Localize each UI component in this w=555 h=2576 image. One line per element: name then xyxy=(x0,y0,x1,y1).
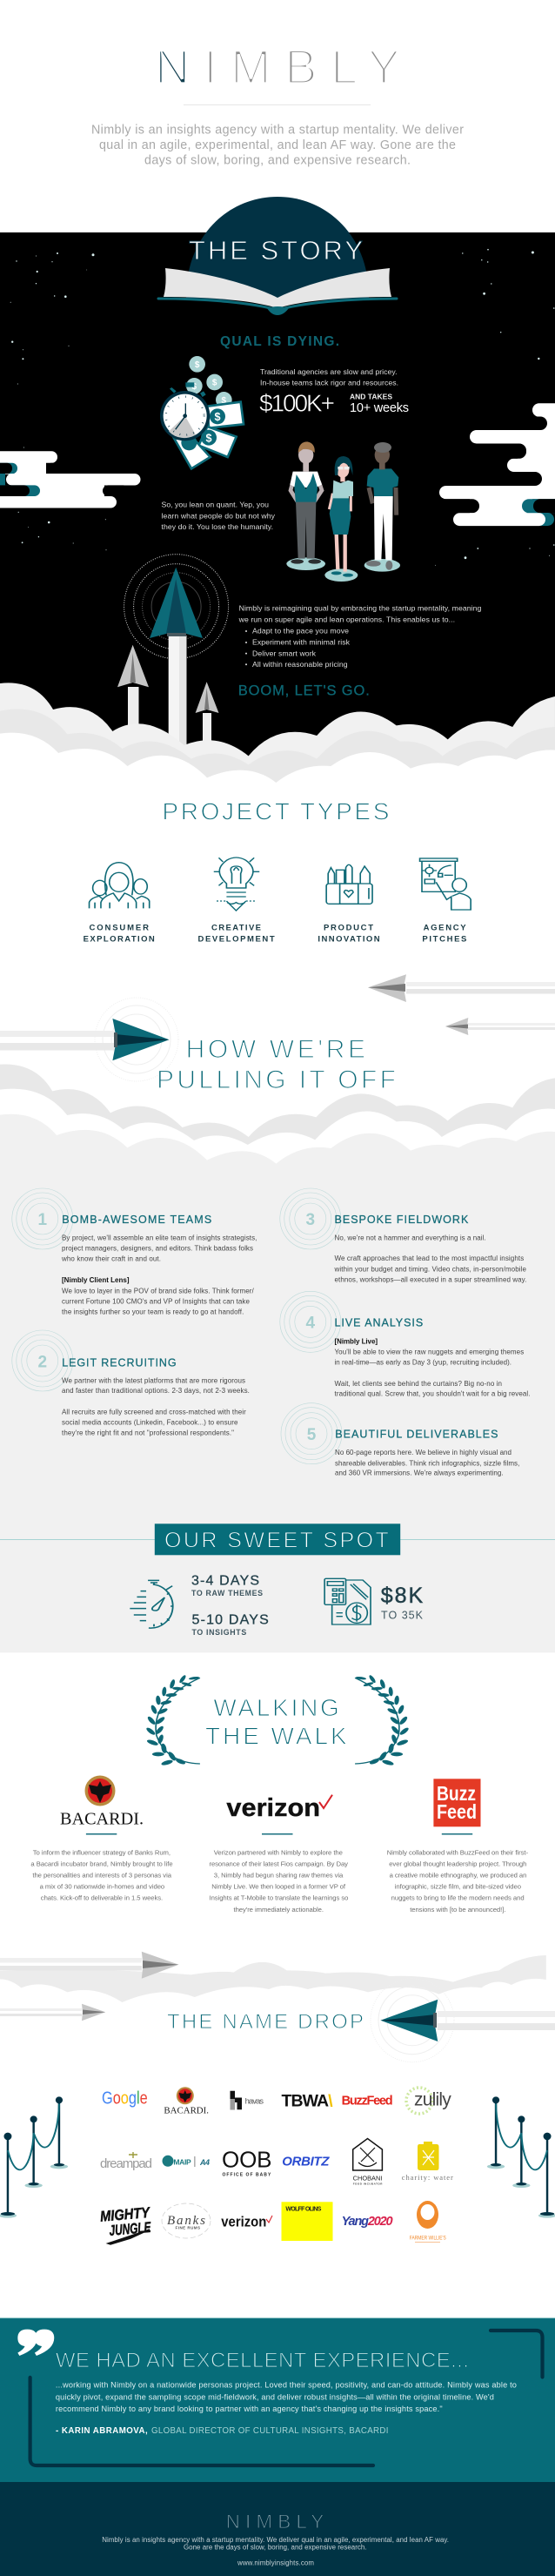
heading: HOW WE'RE xyxy=(186,1035,365,1064)
panel: how it works steps xyxy=(0,1184,555,1652)
illustration: three people xyxy=(286,441,400,582)
right space cloud xyxy=(435,403,555,526)
logo: google: Google xyxy=(102,2089,148,2109)
logo: wolff olins: WOLFF OLINS xyxy=(285,2206,322,2212)
arrow: teal xyxy=(380,2000,555,2041)
case text: they're immediately actionable. xyxy=(233,1906,324,1914)
panel: how we're pulling it off xyxy=(0,974,555,1094)
step 1: By project, we'll assemble an elite team of insights strategists, xyxy=(62,1234,257,1241)
step 1: current Fortune 100 CMO's and VP of Insights that can take xyxy=(62,1297,250,1305)
intro text: Nimbly is an insights agency with a startup mentality. We deliver xyxy=(91,124,464,138)
left stanchions xyxy=(0,2096,68,2218)
step 2 xyxy=(38,1354,250,1437)
text: reimagining qual xyxy=(238,604,482,669)
step 3 xyxy=(306,1211,527,1283)
step 2: they're the right fit and not "professional respondents." xyxy=(62,1429,234,1437)
labels: EXPLORATION xyxy=(84,935,155,945)
icon: lightbulb pencil xyxy=(214,858,259,911)
logo: charity water: charity: water xyxy=(402,2173,453,2182)
stat: timing: 3-4 DAYS xyxy=(191,1574,259,1589)
icon: stopwatch, coins and bills: $ xyxy=(222,396,227,406)
icon: stopwatch, coins and bills xyxy=(160,356,244,468)
rings behind teal arrow xyxy=(95,998,178,1081)
heading: PULLING IT OFF xyxy=(157,1066,396,1094)
icon: calculator and invoice xyxy=(324,1578,371,1624)
text: traditional agencies xyxy=(260,367,398,387)
right stanchions xyxy=(487,2096,555,2218)
heading: boom lets go: BOOM, LET'S GO. xyxy=(238,683,370,699)
step 4: LIVE ANALYSIS xyxy=(334,1316,423,1328)
case: buzzfeed xyxy=(387,1779,528,1914)
logo: mighty jungle: MIGHTY xyxy=(99,2204,151,2225)
logo: banks rums: FINE RUMS xyxy=(176,2226,200,2230)
stat: cost: TO 35K xyxy=(381,1610,424,1622)
quote text: recommend Nimbly to any brand looking to partner with an agency that's changing up the insights space." xyxy=(56,2404,443,2413)
icon: laurel wreath xyxy=(145,1674,410,1766)
logo: chobani: CHOBANI xyxy=(353,2176,382,2183)
case text: resonance of their latest Fios campaign. By Day xyxy=(209,1860,348,1868)
logo: havas xyxy=(230,2091,264,2109)
left space cloud xyxy=(0,451,141,508)
logo: buzzfeed: Buzz xyxy=(437,1782,476,1805)
step 2: We partner with the latest platforms that are more rigorous xyxy=(62,1376,245,1384)
logo: maip: MAIP xyxy=(173,2158,191,2167)
logo: bacardi: BACARDI. xyxy=(164,2105,209,2115)
bracket: bottom left xyxy=(30,2378,373,2465)
logo: verizon: verizon xyxy=(221,2215,266,2230)
logo: verizon: verizon xyxy=(226,1794,320,1822)
rings xyxy=(371,1979,454,2062)
rocket rings xyxy=(124,555,229,659)
text: reimagining qual: Deliver smart work xyxy=(252,649,317,657)
step 3: No, we're not a hammer and everything is a nail. xyxy=(334,1234,486,1241)
step 4: You'll be able to view the raw nuggets and emerging themes xyxy=(334,1349,524,1356)
case: verizon xyxy=(209,1794,348,1914)
step 1: [Nimbly Client Lens] xyxy=(62,1276,130,1284)
step 1: BOMB-AWESOME TEAMS xyxy=(62,1214,211,1226)
logo: banks rums xyxy=(162,2203,211,2238)
case text: Nimbly Live. We then looped in a former VP of xyxy=(211,1883,346,1891)
man with vest xyxy=(286,441,325,570)
arrow: gray large xyxy=(0,1952,179,1979)
footer text xyxy=(102,2536,449,2566)
logo: yang 2020: Yang2020 xyxy=(342,2215,393,2229)
text: lean on quant: learn what people do but not why xyxy=(162,512,276,521)
clouds: top of gray panel xyxy=(0,1064,555,1190)
icon: stopwatch, coins and bills: $ xyxy=(195,360,200,370)
arrow: gray large xyxy=(368,974,555,1002)
step 4: in real-time—as early as Day 3 (yup, recruiting included). xyxy=(334,1359,512,1367)
logo: mighty jungle: JUNGLE xyxy=(109,2219,152,2239)
logo: farmer willies xyxy=(410,2201,446,2243)
step 3: 3 xyxy=(306,1211,315,1229)
heading: WALKING xyxy=(213,1694,339,1721)
footer text: Gone are the days of slow, boring, and expensive research. xyxy=(184,2544,367,2552)
attribution: GLOBAL DIRECTOR OF CULTURAL INSIGHTS, BACARDI xyxy=(151,2426,388,2436)
logo: maip: A4 xyxy=(199,2158,210,2167)
text: reimagining qual: Nimbly is reimagining qual by embracing the startup mentality, meaning xyxy=(239,604,482,613)
labels: DEVELOPMENT xyxy=(198,935,275,945)
logo: banks rums: Banks xyxy=(167,2214,205,2228)
heading: qual is dying: QUAL IS DYING. xyxy=(220,334,339,349)
logo: buzzfeed: BuzzFeed xyxy=(342,2095,393,2109)
text: traditional agencies: Traditional agencies are slow and pricey. xyxy=(260,367,397,376)
logo: chobani: FOOD INCUBATOR xyxy=(353,2182,383,2185)
icon: stopwatch xyxy=(130,1580,173,1628)
quote text xyxy=(56,2381,517,2413)
logo wordmark: N IMBLY xyxy=(155,39,400,94)
footer text: www.nimblyinsights.com xyxy=(237,2559,314,2566)
logo: charity water xyxy=(402,2142,453,2182)
stat: timing: 5-10 DAYS xyxy=(191,1612,269,1627)
stat: cost: $100K+ xyxy=(259,390,335,417)
text: lean on quant xyxy=(162,501,276,531)
heading: PROJECT TYPES xyxy=(162,798,389,825)
stat: timing: TO RAW THEMES xyxy=(191,1589,263,1597)
logo: buzzfeed: Feed xyxy=(437,1800,477,1823)
case: bacardi xyxy=(30,1776,173,1902)
heading: THE NAME DROP xyxy=(167,2010,364,2034)
logo: zulily xyxy=(406,2088,451,2114)
clouds band xyxy=(0,1955,546,2002)
step 2: 2 xyxy=(38,1354,47,1372)
labels: PRODUCT xyxy=(324,924,373,933)
heading: the story: THE STORY xyxy=(189,235,363,266)
step 5: BEAUTIFUL DELIVERABLES xyxy=(335,1429,498,1441)
panel: our sweet spot xyxy=(0,1523,555,1637)
banner: OUR SWEET SPOT xyxy=(164,1528,389,1552)
arrow: gray small xyxy=(445,1018,555,1035)
step 4: [Nimbly Live] xyxy=(334,1337,378,1345)
step 2: social media accounts (Linkedin, Facebook...) to ensure xyxy=(62,1418,238,1426)
stat: cost: $8K xyxy=(381,1584,424,1608)
logo: wolff olins xyxy=(282,2202,332,2241)
logo wall xyxy=(99,2087,453,2244)
step 3: BESPOKE FIELDWORK xyxy=(334,1214,469,1226)
logo: office of baby: OFFICE OF BABY xyxy=(223,2172,271,2177)
case text: a mix of 30 nationwide in-homes and video xyxy=(40,1883,164,1891)
text: lean on quant: So, you lean on quant. Yep, you xyxy=(162,501,269,509)
logo: mighty jungle xyxy=(99,2204,153,2244)
woman with glasses xyxy=(324,456,358,582)
step 3: within your budget and timing. Video chats, in-person/mobile xyxy=(334,1265,527,1273)
step 5: No 60-page reports here. We believe in highly visual and xyxy=(335,1449,512,1456)
number rings xyxy=(12,1188,342,1464)
logo: havas: havas xyxy=(245,2097,264,2107)
panel: the name drop xyxy=(0,1952,555,2244)
step 5: 5 xyxy=(307,1426,317,1444)
logo: orbitz: ORBITZ xyxy=(282,2155,330,2169)
panel: walking the walk xyxy=(30,1674,528,1914)
labels: AGENCY xyxy=(424,924,466,933)
icon: product bag xyxy=(326,864,372,904)
attribution: - KARIN ABRAMOVA, xyxy=(56,2426,148,2436)
logo: zulily: zulily xyxy=(414,2089,451,2109)
step 4: traditional qual. Screw that, you shouldn't wait for a big reveal. xyxy=(334,1390,531,1398)
case text: the personalities and interests of 3 personas via xyxy=(32,1872,172,1880)
logo: bacardi: BACARDI. xyxy=(60,1810,144,1829)
heading: WE HAD AN EXCELLENT EXPERIENCE... xyxy=(56,2349,469,2372)
footer text: Nimbly is an insights agency with a startup mentality. We deliver qual in an agile, experimental, and lean AF way. xyxy=(102,2536,449,2544)
stat: time xyxy=(350,393,409,415)
step 1 xyxy=(38,1211,257,1316)
logo: bacardi xyxy=(60,1776,144,1829)
heading xyxy=(205,1694,347,1749)
case text: To inform the influencer strategy of Banks Rum, xyxy=(33,1849,171,1857)
panel: project types xyxy=(84,798,471,945)
bracket: top right xyxy=(491,2331,543,2377)
step 3: ethnos, workshops—all executed in a super streamlined way. xyxy=(334,1275,526,1283)
stat: time: 10+ weeks xyxy=(350,401,409,415)
case text xyxy=(387,1849,528,1914)
step 4 xyxy=(306,1315,531,1398)
intro text: qual in an agile, experimental, and lean AF way. Gone are the xyxy=(99,138,456,152)
step 1: 1 xyxy=(38,1211,48,1229)
icon: paper arrows flying up xyxy=(117,568,219,749)
icon: open book with dome xyxy=(158,197,397,315)
panel: testimonial xyxy=(0,2317,555,2482)
quote text: ...working with Nimbly on a nationwide personas project. Loved their speed, positivity, and can-do attitude. Nimbly was able to xyxy=(56,2381,517,2390)
case text: 3, Nimbly had begun sharing raw themes via xyxy=(214,1872,344,1880)
case text: ever global thought leadership project. Through xyxy=(389,1860,526,1868)
icon: agency pitch xyxy=(420,858,471,910)
logo: bacardi xyxy=(164,2087,209,2115)
intro text: days of slow, boring, and expensive research. xyxy=(144,153,411,167)
case text xyxy=(209,1849,348,1914)
labels: PITCHES xyxy=(422,935,466,945)
stars xyxy=(10,249,555,566)
icon: stopwatch, coins and bills: $ xyxy=(205,432,212,444)
icon: stopwatch, coins and bills: $ xyxy=(212,379,217,388)
heading: THE WALK xyxy=(205,1722,347,1749)
step 1: We love to layer in the POV of brand side folks. Think former/ xyxy=(62,1287,254,1295)
icon: consumers xyxy=(90,863,150,908)
intro text xyxy=(91,124,464,167)
step 4: 4 xyxy=(306,1315,316,1333)
step 5: and 360 VR immersions. We're always experimenting. xyxy=(335,1470,504,1477)
step 1: project managers, designers, and editors. Think badass folks xyxy=(62,1244,253,1252)
text: lean on quant: they do it. You lose the humanity. xyxy=(162,522,273,531)
stat: time: AND TAKES xyxy=(350,393,392,401)
arrow: gray small xyxy=(0,2004,105,2021)
step 3: We craft approaches that lead to the most impactful insights xyxy=(334,1254,524,1262)
case text: Nimbly collaborated with BuzzFeed on their first- xyxy=(387,1849,528,1857)
logo: tbwa: TBWA\ xyxy=(282,2091,333,2110)
icon: stopwatch, coins and bills: $ xyxy=(214,411,221,423)
logo: chobani xyxy=(353,2138,383,2185)
case text: infographic, sizzle film, and bite-sized video xyxy=(395,1883,521,1891)
labels xyxy=(84,924,466,945)
text: reimagining qual: Experiment with minimal risk xyxy=(252,638,351,647)
step 5: shareable deliverables. Think rich infographics, sizzle films, xyxy=(335,1459,519,1467)
case text: a Bacardi incubator brand, Nimbly brought to life xyxy=(30,1860,173,1868)
labels: INNOVATION xyxy=(318,935,380,945)
icon: quote mark xyxy=(17,2330,54,2356)
step 1: who know their craft in and out. xyxy=(61,1254,161,1262)
text: reimagining qual: we run on super agile and lean operations. This enables us to... xyxy=(238,615,455,623)
icons xyxy=(90,858,471,911)
step 5 xyxy=(307,1426,519,1477)
case text: nuggets to bring to life the modern needs and xyxy=(391,1894,525,1902)
case text: chats. Kick-off to deliverable in 1.5 weeks. xyxy=(41,1894,163,1902)
arrow: teal xyxy=(0,1019,169,1060)
footer logo: NIMBLY xyxy=(226,2511,324,2532)
text: reimagining qual: All within reasonable pricing xyxy=(252,660,348,669)
case text xyxy=(30,1849,173,1902)
step 1: the insights further so your team is ready to go at handoff. xyxy=(62,1308,244,1316)
step 2: All recruits are fully screened and cross-matched with their xyxy=(62,1408,246,1416)
heading xyxy=(157,1035,396,1094)
labels: CONSUMER xyxy=(89,924,149,933)
man with white trousers xyxy=(364,442,400,572)
text: reimagining qual: Adapt to the pace you move xyxy=(252,627,349,636)
step 2: LEGIT RECRUITING xyxy=(62,1356,177,1369)
logo: farmer willies: FARMER WILLIE'S xyxy=(410,2236,446,2242)
text: traditional agencies: In-house teams lack rigor and resources. xyxy=(260,378,398,387)
step 2: and faster than traditional options. 2-3 days, not 2-3 weeks. xyxy=(62,1387,250,1395)
quote text: quickly pivot, expand the sampling scope mid-fieldwork, and deliver robust insights—all within the original timeline. We'd xyxy=(56,2392,494,2401)
logo: buzzfeed xyxy=(433,1779,480,1826)
footer xyxy=(0,2482,555,2576)
case text: tensions with [to be announced!]. xyxy=(410,1906,505,1914)
logo: office of baby: OOB xyxy=(222,2146,271,2172)
labels: CREATIVE xyxy=(211,924,261,933)
clouds: bottom of sky xyxy=(0,683,555,836)
stat: timing xyxy=(191,1574,269,1637)
icon: stopwatch, coins and bills: $ xyxy=(192,382,197,392)
case text: Insights at T-Mobile to translate the learnings so xyxy=(209,1894,348,1902)
logo: dreampad: dreampad xyxy=(100,2156,152,2171)
stat: timing: TO INSIGHTS xyxy=(191,1628,246,1637)
step 4: Wait, let clients see behind the curtains? Big no-no in xyxy=(334,1380,502,1388)
case text: Verizon partnered with Nimbly to explore the xyxy=(214,1849,343,1857)
panel: the story night sky xyxy=(0,197,555,790)
logo: maip xyxy=(162,2156,210,2167)
header xyxy=(91,39,464,167)
case text: a creative mobile ethnography, we produced an xyxy=(390,1872,526,1880)
stat: cost xyxy=(381,1584,424,1622)
